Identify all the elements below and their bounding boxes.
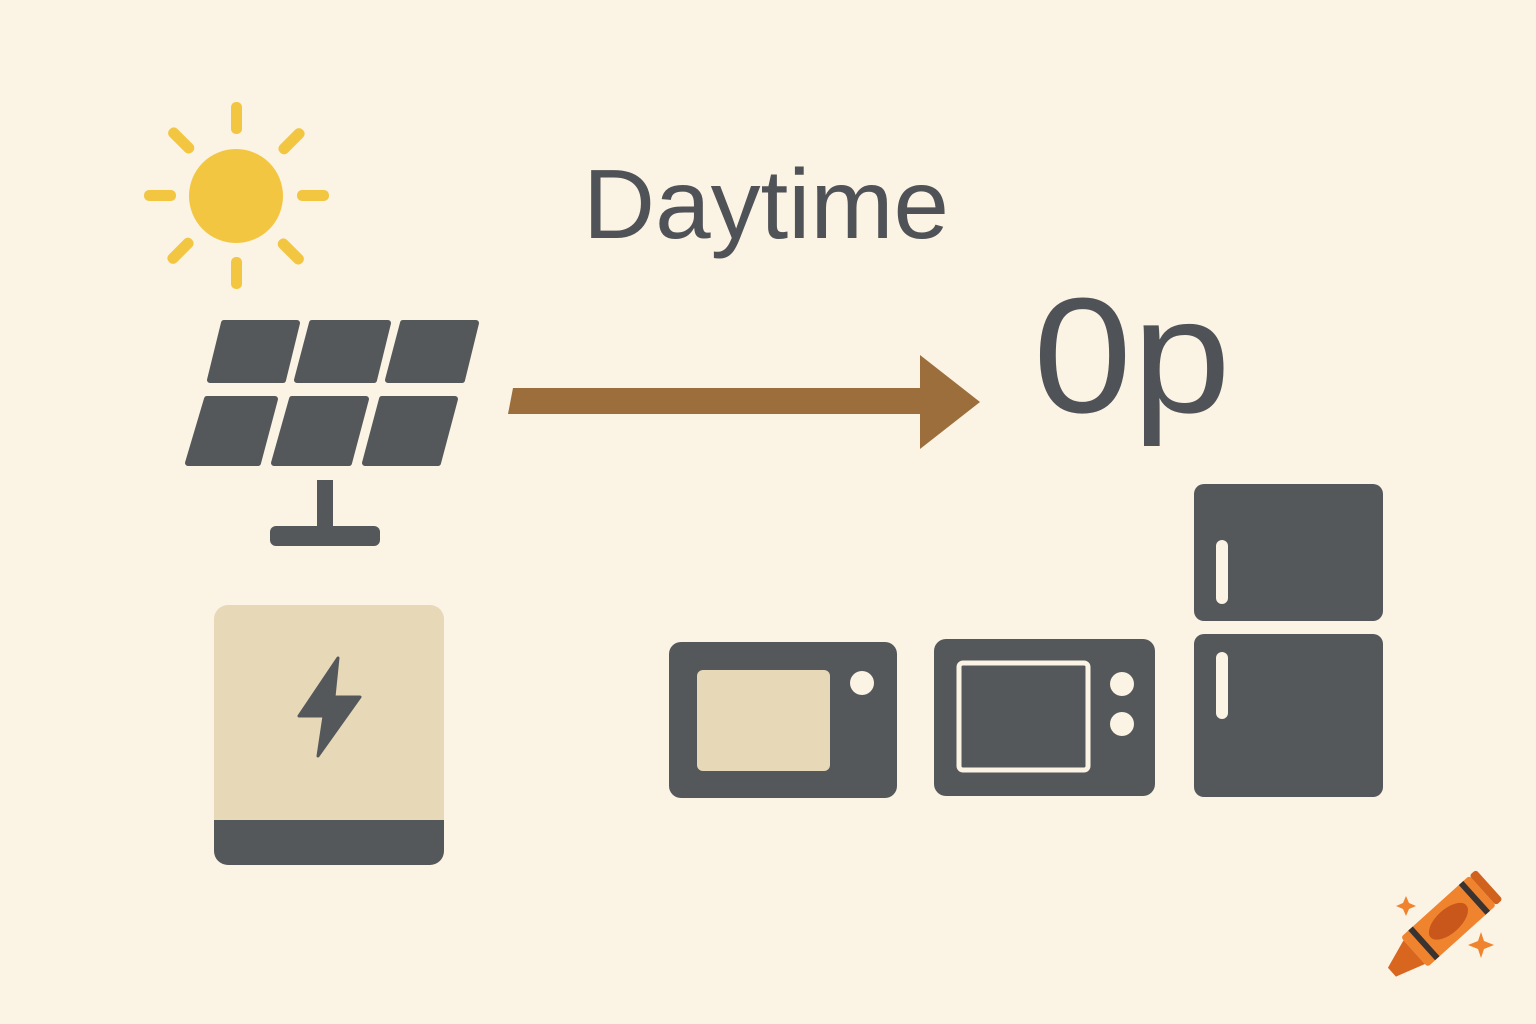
icon: solar panel <box>188 323 476 546</box>
icon: microwave 1 <box>669 642 897 798</box>
icon: sun <box>144 102 329 289</box>
icon: crayon logo <box>1379 870 1503 987</box>
icon: microwave 2 <box>934 639 1155 796</box>
heading: Daytime: Daytime <box>583 149 949 259</box>
icon: fridge <box>1194 484 1383 797</box>
icon: battery <box>214 605 444 865</box>
label: 0p: 0p <box>1033 264 1231 447</box>
arrow <box>508 355 980 449</box>
